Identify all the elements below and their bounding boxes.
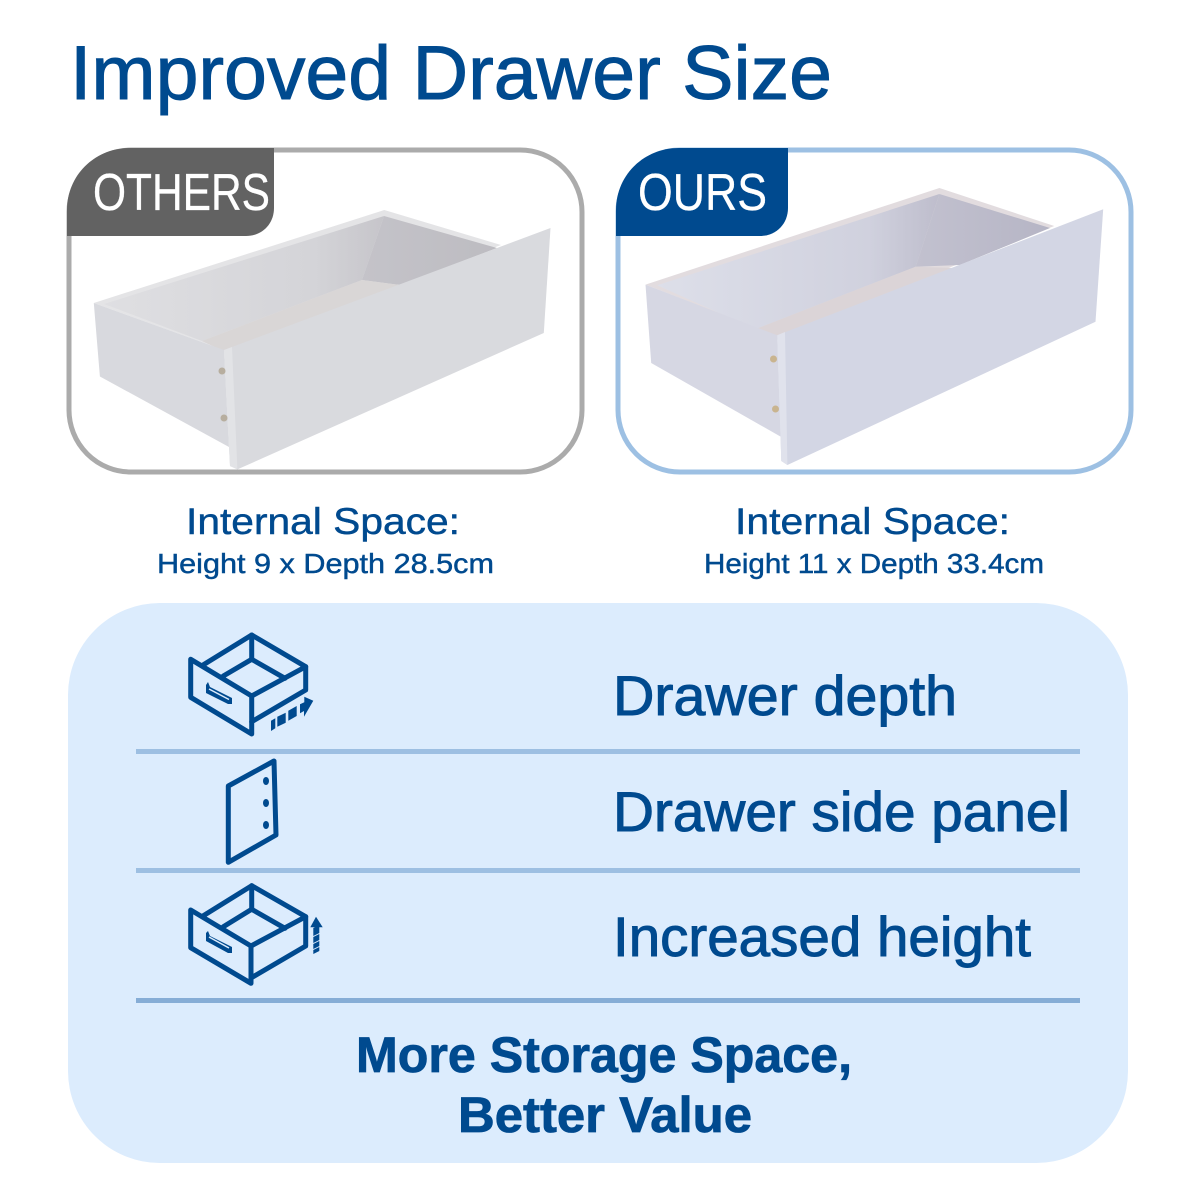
panel: others bbox=[67, 148, 582, 472]
title: Improved Drawer Size bbox=[70, 31, 832, 116]
panel: benefits bbox=[68, 603, 1128, 1163]
drawer photo: ours bbox=[646, 188, 1103, 465]
panel: ours bbox=[616, 148, 1131, 472]
caption: ours: Internal Space: bbox=[735, 501, 1010, 542]
closing statement bbox=[356, 1027, 852, 1143]
caption: others: Internal Space: bbox=[186, 501, 460, 542]
label: drawer side panel: Drawer side panel bbox=[613, 780, 1070, 843]
caption: ours bbox=[704, 501, 1044, 579]
label: drawer depth: Drawer depth bbox=[613, 664, 957, 727]
label: increased height: Increased height bbox=[613, 905, 1031, 968]
closing statement: More Storage Space, bbox=[356, 1027, 852, 1083]
icon: increased height bbox=[191, 886, 323, 983]
drawer photo: others bbox=[94, 210, 551, 469]
caption: others bbox=[157, 501, 494, 579]
tab: ours bbox=[616, 148, 788, 236]
closing statement: Better Value bbox=[458, 1087, 752, 1143]
icon: drawer side panel bbox=[228, 761, 276, 862]
tab label: ours: OURS bbox=[638, 164, 767, 222]
caption: others: Height 9 x Depth 28.5cm bbox=[157, 548, 494, 579]
tab: others bbox=[67, 148, 274, 236]
icon: drawer depth bbox=[191, 635, 313, 734]
caption: ours: Height 11 x Depth 33.4cm bbox=[704, 548, 1044, 579]
tab label: others: OTHERS bbox=[93, 164, 270, 222]
